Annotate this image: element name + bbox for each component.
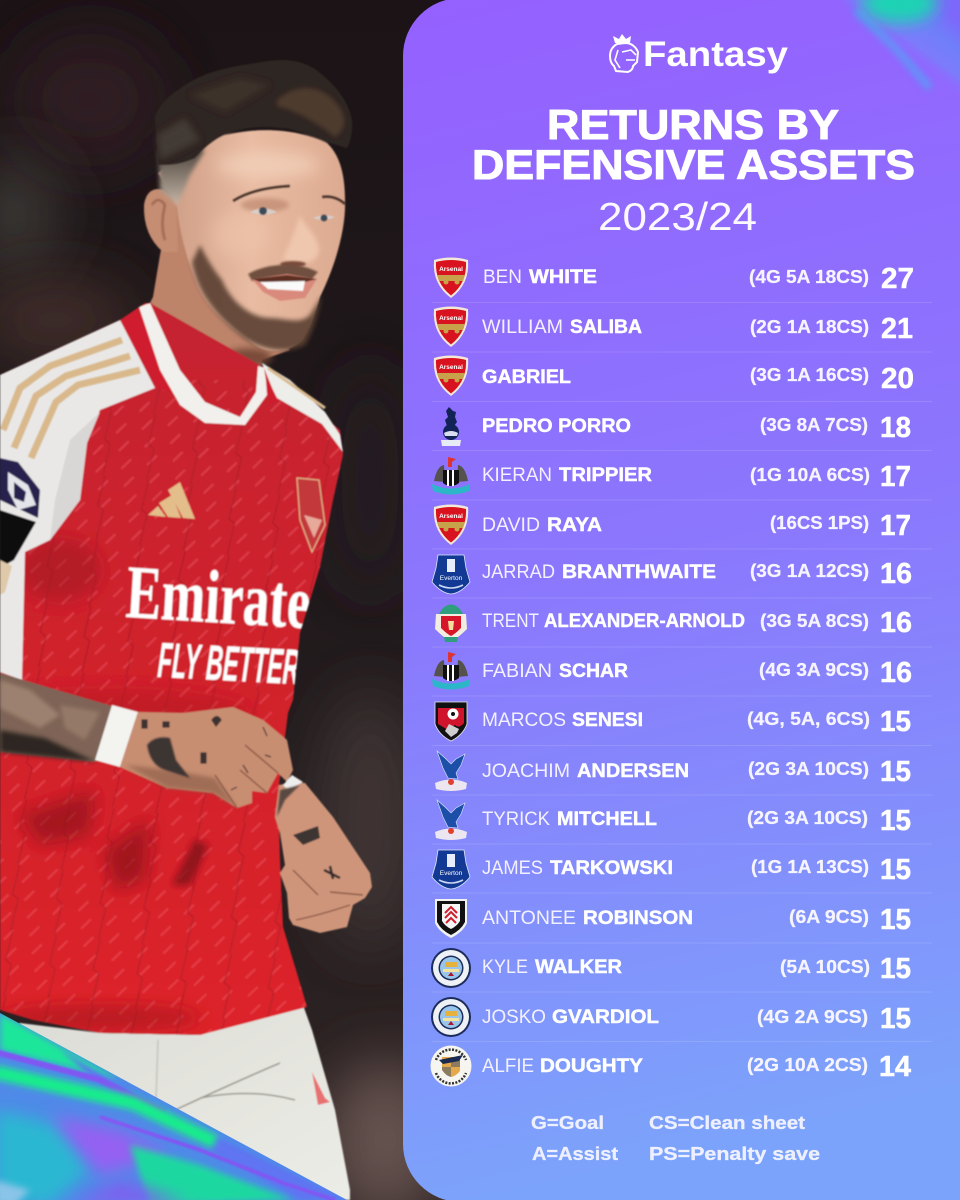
right hand	[275, 775, 372, 933]
name: JARRAD	[482, 561, 555, 583]
name	[483, 266, 597, 288]
name: BRANTHWAITE	[562, 562, 716, 583]
logo: Fantasy: Fantasy	[643, 35, 789, 74]
legend: CS=Clean sheet	[649, 1112, 805, 1133]
crest: Arsenal	[434, 356, 468, 396]
total: 18	[880, 412, 911, 444]
total: 16	[880, 657, 912, 689]
name: WHITE	[529, 267, 597, 288]
row: Jarrad Branthwaite	[432, 555, 912, 594]
row: Marcos Senesi	[435, 702, 911, 741]
name: SALIBA	[570, 317, 642, 338]
tattooed forearm	[0, 673, 112, 762]
neck tattoo	[208, 358, 216, 372]
crest: Liverpool	[435, 604, 467, 642]
crest: Bournemouth	[435, 702, 467, 741]
name: WILLIAM	[482, 316, 563, 338]
name	[482, 1006, 659, 1028]
name: MARCOS	[482, 709, 566, 731]
total: 20	[881, 363, 914, 395]
total: 16	[880, 607, 912, 639]
row: David Raya	[434, 504, 911, 545]
row: Trent Alexander-Arnold	[435, 604, 912, 642]
stats: (4G 2A 9CS)	[757, 1007, 868, 1027]
name: GABRIEL	[482, 367, 571, 388]
total: 15	[880, 805, 911, 837]
stats: (5A 10CS)	[780, 957, 870, 977]
total: 21	[881, 313, 913, 345]
name: TRIPPIER	[559, 465, 652, 486]
legend	[531, 1112, 820, 1164]
collar	[120, 303, 200, 402]
name	[482, 857, 673, 879]
club crest on shirt	[297, 478, 325, 552]
name: SCHAR	[559, 661, 628, 682]
name: GVARDIOL	[552, 1007, 659, 1028]
stats: (1G 1A 13CS)	[751, 857, 869, 877]
crest: Everton	[432, 850, 470, 889]
legend: G=Goal	[531, 1112, 604, 1133]
crest: Crystal Palace	[435, 751, 467, 791]
stats: (3G 8A 7CS)	[760, 415, 868, 435]
wristband	[95, 705, 138, 767]
stats: (6A 9CS)	[789, 907, 869, 927]
name: PEDRO PORRO	[482, 416, 631, 437]
crest: Fulham	[435, 899, 467, 938]
name	[482, 956, 622, 978]
total: 15	[880, 854, 911, 886]
name: KYLE	[482, 956, 528, 978]
panel: stats list background	[403, 0, 960, 1200]
beard and moustache	[192, 245, 322, 350]
row: Fabian Schar	[432, 652, 912, 690]
stats: (4G, 5A, 6CS)	[747, 709, 870, 729]
crest: Newcastle	[432, 457, 470, 494]
crest: Arsenal: Arsenal	[439, 266, 463, 273]
title: DEFENSIVE ASSETS	[472, 141, 915, 188]
crest: Everton: Everton	[440, 870, 463, 877]
row: Ben White	[434, 258, 914, 298]
left hand	[120, 707, 293, 808]
legend: A=Assist	[532, 1143, 618, 1164]
hair	[155, 60, 352, 165]
stats: (3G 5A 8CS)	[760, 611, 869, 631]
total: 17	[880, 461, 911, 493]
row: Tyrick Mitchell	[435, 800, 911, 840]
row: Kyle Walker	[431, 948, 911, 988]
total: 16	[880, 558, 912, 590]
gold sleeve stripes	[3, 340, 140, 458]
stats: (16CS 1PS)	[770, 513, 869, 533]
stats: (2G 3A 10CS)	[748, 759, 869, 779]
face	[158, 130, 345, 351]
name: ANTONEE	[482, 907, 576, 929]
crest: Tottenham	[441, 407, 461, 446]
stats: (3G 1A 16CS)	[750, 365, 869, 385]
name	[482, 907, 693, 929]
stats: (1G 10A 6CS)	[750, 465, 870, 485]
eyebrows	[233, 186, 345, 204]
captain armband with league patch	[0, 458, 40, 595]
total: 15	[880, 756, 911, 788]
name	[482, 808, 657, 830]
crest: Manchester City	[431, 948, 471, 988]
name	[482, 760, 689, 782]
name: ALFIE	[482, 1055, 534, 1077]
crest: Crystal Palace	[435, 800, 467, 840]
legend: PS=Penalty save	[649, 1143, 820, 1164]
corner graphic: top-right gradient	[845, 0, 960, 92]
total: 15	[880, 706, 911, 738]
name: TARKOWSKI	[550, 858, 673, 879]
name: TRENT	[482, 610, 539, 632]
smile with teeth	[252, 274, 317, 301]
shirt sponsor: Emirates	[124, 550, 334, 646]
stats: (4G 3A 9CS)	[759, 660, 869, 680]
total: 15	[880, 1003, 911, 1035]
crest: Arsenal: Arsenal	[439, 513, 463, 520]
shirt torso	[0, 303, 350, 1040]
stats: (4G 5A 18CS)	[749, 267, 869, 287]
player photo illustration	[0, 60, 372, 1200]
eyes	[241, 198, 335, 222]
crest: Arsenal	[434, 504, 468, 545]
name	[482, 561, 716, 583]
name: FABIAN	[482, 660, 552, 682]
name: DAVID	[482, 514, 540, 536]
crest: Everton: Everton	[440, 575, 463, 582]
row: Alfie Doughty	[430, 1046, 911, 1086]
row: James Tarkowski	[432, 850, 911, 889]
name: BEN	[483, 266, 522, 288]
corner graphic: holographic wedge	[0, 1010, 350, 1200]
name	[482, 1055, 643, 1077]
name: WALKER	[535, 957, 622, 978]
crest: Arsenal: Arsenal	[439, 364, 463, 371]
cropped fade of hair	[158, 150, 205, 205]
stats: (3G 1A 12CS)	[750, 561, 869, 581]
name: KIERAN	[482, 464, 552, 486]
name: MITCHELL	[557, 809, 657, 830]
name: ALEXANDER-ARNOLD	[544, 611, 745, 632]
total: 27	[881, 263, 914, 295]
row: Josko Gvardiol	[431, 997, 911, 1037]
name: RAYA	[547, 515, 602, 536]
crest: Arsenal: Arsenal	[439, 315, 463, 322]
stats: (2G 3A 10CS)	[747, 808, 868, 828]
total: 17	[880, 510, 911, 542]
crest: Newcastle	[432, 652, 470, 690]
row: Joachim Andersen	[435, 751, 911, 791]
shirt sponsor: FLY BETTER	[156, 632, 301, 695]
name: JAMES	[482, 857, 543, 879]
nose	[280, 215, 319, 267]
crest: Arsenal	[434, 306, 468, 347]
stats: (2G 10A 2CS)	[747, 1055, 868, 1075]
total: 15	[880, 904, 911, 936]
name	[482, 709, 643, 731]
neck	[148, 195, 290, 420]
name: ANDERSEN	[577, 761, 689, 782]
name: DOUGHTY	[540, 1056, 643, 1077]
row: Pedro Porro	[441, 407, 911, 446]
right shoulder white with stripe	[262, 363, 343, 452]
name	[482, 660, 628, 682]
row: Antonee Robinson	[435, 899, 911, 938]
crest: Arsenal	[434, 258, 468, 298]
total: 15	[880, 953, 911, 985]
title: RETURNS BY	[547, 101, 839, 148]
season subtitle: 2023/24	[598, 196, 757, 239]
name	[482, 464, 652, 486]
ear	[144, 189, 178, 252]
crest: Everton	[432, 555, 470, 594]
name	[482, 514, 602, 536]
name: JOSKO	[482, 1006, 546, 1028]
adidas logo	[148, 482, 195, 519]
name: JOACHIM	[482, 760, 570, 782]
row: William Saliba	[434, 306, 913, 347]
name: SENESI	[572, 710, 643, 731]
name	[482, 316, 642, 338]
name: TYRICK	[482, 808, 550, 830]
title	[472, 101, 915, 188]
icon: lion	[610, 34, 638, 72]
stats: (2G 1A 18CS)	[750, 317, 869, 337]
name: ROBINSON	[583, 908, 693, 929]
crest: Manchester City	[431, 997, 471, 1037]
row: Gabriel	[434, 356, 914, 396]
row: Kieran Trippier	[432, 457, 911, 494]
crest: Luton Town	[430, 1046, 472, 1086]
shirt sponsor	[124, 566, 310, 686]
shorts	[0, 1005, 350, 1200]
total: 14	[879, 1051, 911, 1083]
left sleeve white	[0, 320, 155, 680]
